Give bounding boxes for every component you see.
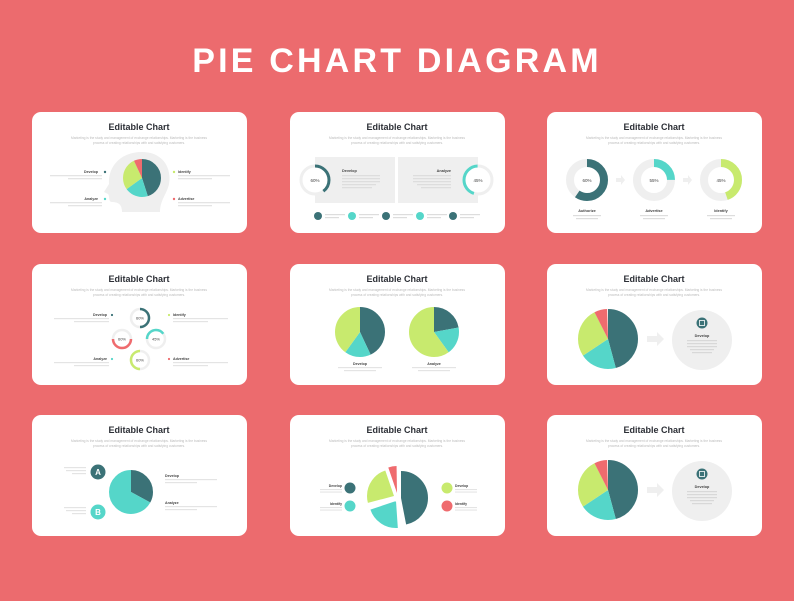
rings: 60% — [136, 358, 144, 362]
title: PIE CHART DIAGRAM — [192, 42, 602, 80]
panel: card 9 pie to circle — [547, 415, 762, 536]
donut: Authorize 60%: Authorize — [578, 209, 596, 213]
icons left: Develop — [329, 484, 342, 488]
rings: 60% — [118, 336, 126, 342]
callout circle: Develop — [672, 310, 732, 370]
callout circle: Develop: Develop — [695, 334, 710, 338]
pie chart — [593, 324, 623, 354]
panel: card 1 head pie: Advertise — [178, 197, 194, 201]
panel: card 4 four rings: process of creating relationships with and satisfying customers. — [93, 293, 185, 297]
arrow — [647, 483, 664, 497]
panel: card 8 exploded pie: process of creating relationships with and satisfying customers. — [351, 444, 443, 448]
pie chart — [593, 475, 623, 505]
panel: card 3 three donuts — [547, 112, 762, 233]
panel: card 8 exploded pie: Marketing is the study and management of exchange relationships. Marketing is the business — [329, 439, 465, 443]
panel: card 6 pie to circle: process of creating relationships with and satisfying customers. — [608, 293, 700, 297]
panel: card 4 four rings: Analyze — [93, 357, 107, 361]
icons right: Develop — [455, 484, 468, 488]
pie chart — [132, 168, 152, 188]
donut: Identify 45% — [704, 163, 738, 219]
exploded pie — [380, 480, 414, 514]
rings: 45% — [152, 336, 160, 342]
panel: card 3 three donuts: Editable Chart — [623, 122, 685, 132]
panel: card 4 four rings — [32, 264, 247, 385]
rings: 60% — [136, 316, 144, 320]
badge B — [90, 504, 106, 520]
panel: card 9 pie to circle: Marketing is the study and management of exchange relationships. Marketing is the business — [586, 439, 722, 443]
pie: Analyze — [412, 320, 456, 371]
panel: card 2 donut panels: Editable Chart — [366, 122, 428, 132]
panel: card 2 donut panels: Marketing is the study and management of exchange relationships. Marketing is the business — [329, 136, 465, 140]
panel: card 6 pie to circle: Editable Chart — [623, 274, 685, 284]
panel: card 8 exploded pie — [290, 415, 505, 536]
icons row — [314, 212, 480, 220]
panel: card 3 three donuts: Marketing is the study and management of exchange relationships. Marketing is the business — [586, 136, 722, 140]
callout circle: Develop — [672, 461, 732, 521]
pie chart — [120, 481, 142, 503]
panel: card 9 pie to circle: Editable Chart — [623, 425, 685, 435]
panel: card 2 donut panels: Develop — [342, 169, 357, 173]
panel: card 1 head pie: Develop — [84, 170, 99, 174]
panel: card 7 A/B pie: Marketing is the study and management of exchange relationships. Marketing is the business — [71, 439, 207, 443]
donut: Identify 45%: 45% — [716, 178, 726, 183]
panel: card 7 A/B pie: Develop — [165, 474, 180, 478]
panel: card 5 two pies: process of creating relationships with and satisfying customers. — [351, 293, 443, 297]
pie: Develop: Develop — [353, 362, 368, 366]
panel: card 4 four rings: Advertise — [173, 357, 189, 361]
badge B: B — [95, 508, 101, 517]
panel: card 3 three donuts: process of creating relationships with and satisfying customers. — [608, 141, 700, 145]
panel: card 7 A/B pie: Analyze — [165, 501, 179, 505]
badge A: A — [95, 468, 101, 477]
donut: 60% — [300, 165, 330, 195]
panel: card 9 pie to circle: process of creating relationships with and satisfying customers. — [608, 444, 700, 448]
panel: card 1 head pie: Marketing is the study and management of exchange relationships. Marketing is the business — [71, 136, 207, 140]
donut: 45%: 45% — [473, 178, 483, 183]
panel: card 7 A/B pie: Editable Chart — [108, 425, 170, 435]
panel: card 2 donut panels: Analyze — [437, 169, 451, 173]
panel: card 7 A/B pie: process of creating relationships with and satisfying customers. — [93, 444, 185, 448]
panel: card 4 four rings: Marketing is the study and management of exchange relationships. Marketing is the business — [71, 288, 207, 292]
icons left — [320, 482, 356, 512]
panel: card 5 two pies: Editable Chart — [366, 274, 428, 284]
panel: card 1 head pie: process of creating relationships with and satisfying customers. — [93, 141, 185, 145]
icon: head silhouette — [104, 152, 170, 212]
panel: card 4 four rings: Develop — [93, 313, 108, 317]
rings — [113, 309, 165, 369]
donut: Advertise 55% — [637, 163, 671, 219]
panel: card 5 two pies: Marketing is the study and management of exchange relationships. Marketing is the business — [329, 288, 465, 292]
panel: card 1 head pie: Analyze — [84, 197, 98, 201]
panel: card 5 two pies — [290, 264, 505, 385]
pie: Develop — [338, 320, 382, 371]
panel: card 2 donut panels: process of creating relationships with and satisfying customers. — [351, 141, 443, 145]
panel: card 1 head pie — [32, 112, 247, 233]
donut: Advertise 55%: 55% — [649, 178, 659, 183]
panel: card 1 head pie: Identify — [178, 170, 191, 174]
donut: 45% — [463, 165, 493, 195]
panel: card 4 four rings: Identify — [173, 313, 186, 317]
panel: card 4 four rings: Editable Chart — [108, 274, 170, 284]
donut: Authorize 60% — [570, 163, 604, 219]
panel: card 6 pie to circle: Marketing is the study and management of exchange relationships. Marketing is the business — [586, 288, 722, 292]
donut: Advertise 55%: Advertise — [645, 209, 663, 213]
icons right — [442, 482, 477, 512]
arrow — [647, 332, 664, 346]
icons right: Identify — [455, 502, 467, 506]
badge A — [90, 464, 106, 480]
donut: Authorize 60%: 60% — [582, 178, 592, 183]
icons left: Identify — [330, 502, 342, 506]
callout circle: Develop: Develop — [695, 485, 710, 489]
donut: 60%: 60% — [310, 178, 320, 183]
panel: card 8 exploded pie: Editable Chart — [366, 425, 428, 435]
panel: card 1 head pie: Editable Chart — [108, 122, 170, 132]
panel: card 6 pie to circle — [547, 264, 762, 385]
pie: Analyze: Analyze — [427, 362, 441, 366]
donut: Identify 45%: Identify — [714, 209, 729, 213]
panel: card 7 A/B pie — [32, 415, 247, 536]
panel: card 2 donut panels — [290, 112, 505, 233]
